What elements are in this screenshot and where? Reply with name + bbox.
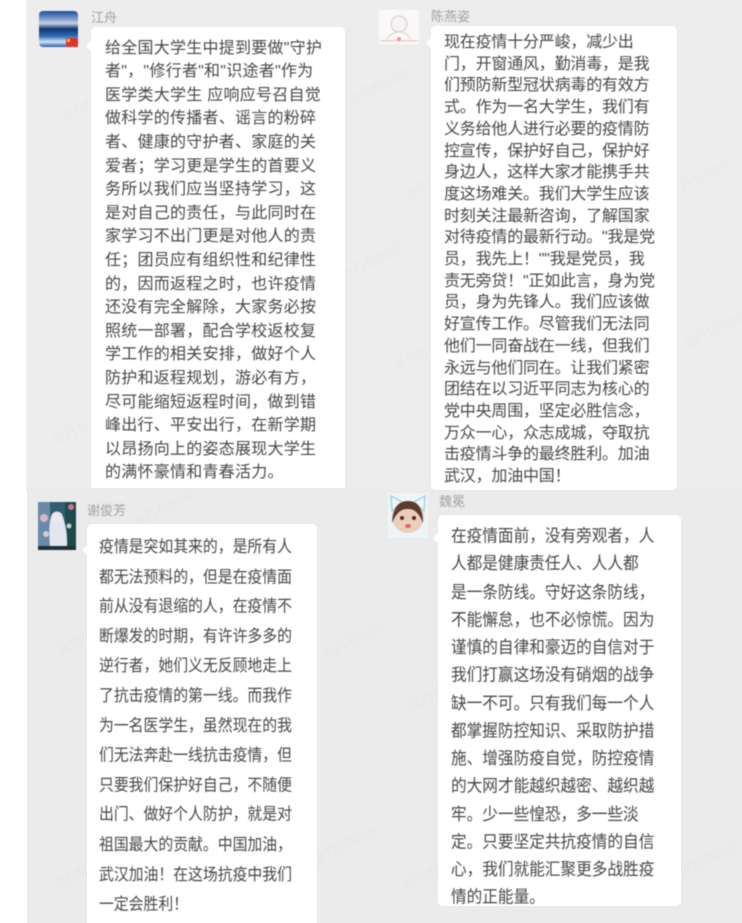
chat background: 张丹标5265: [666, 156, 733, 200]
icon: bubble tail: [426, 38, 431, 48]
message text: 断爆发的时期，有许许多多的: [99, 628, 292, 646]
message text: 情的正能量。: [451, 888, 545, 907]
chat background: 张丹标5265: [391, 328, 458, 372]
message text: 者、健康的守护者、家庭的关: [105, 134, 316, 151]
chat background: 张丹标5265: [401, 848, 468, 892]
message text: 团结在以习近平同志为核心的: [444, 381, 649, 398]
message text: 员，身为先锋人。我们应该做: [444, 294, 649, 311]
message text: 学工作的相关安排，做好个人: [105, 346, 316, 363]
message text: 出门、做好个人防护，就是对: [99, 807, 292, 825]
message text: 们预防新型冠状病毒的有效方: [444, 77, 649, 94]
message text: 前从没有退缩的人，在疫情不: [99, 598, 292, 616]
chat background: 张丹标5265: [51, 848, 118, 892]
panel: message from 江舟: [38, 10, 345, 488]
message text: 控宣传，保护好自己，保护好: [444, 143, 649, 160]
panel: message from 谢俊芳: [37, 501, 317, 923]
message text: 人都是健康责任人、人人都: [451, 555, 639, 574]
message text: 谨慎的自律和豪迈的自信对于: [451, 638, 654, 657]
message text: 的，因而返程之时，也许疫情: [105, 276, 316, 293]
message text: 度这场难关。我们大学生应该: [444, 186, 649, 203]
chat background: 张丹标5265: [346, 63, 413, 107]
message text: [104, 38, 322, 481]
message text: 对待疫情的最新行动。"我是党: [444, 229, 655, 246]
message text: 身边人，这样大家才能携手共: [444, 164, 649, 181]
message text: 家学习不出门更是对他人的责: [105, 228, 316, 245]
chat background: 张丹标5265: [321, 618, 388, 662]
chat background: 张丹标5265: [51, 403, 118, 447]
message text: 还没有完全解除，大家务必按: [105, 299, 316, 316]
message text: [450, 526, 654, 907]
panel: message from 魏冕: [388, 493, 681, 907]
chat background: 张丹标5265: [406, 668, 473, 712]
message text: 击疫情斗争的最终胜利。加油: [444, 446, 649, 463]
icon: bubble tail: [86, 41, 91, 51]
message text: 是对自己的责任，与此同时在: [105, 205, 316, 222]
message text: 在疫情面前，没有旁观者，人: [451, 527, 654, 546]
icon: bubble tail: [433, 533, 438, 543]
message text: 现在疫情十分严峻，减少出: [444, 34, 634, 51]
message text: 万众一心，众志成城，夺取抗: [444, 425, 649, 442]
chat background: 张丹标5265: [339, 238, 406, 282]
chat background: 张丹标5265: [401, 158, 468, 202]
message text: 的大网才能越织越密、越织越: [451, 777, 654, 796]
message text: 做科学的传播者、谣言的粉碎: [105, 110, 316, 127]
message text: 的满怀豪情和青春活力。: [105, 464, 284, 481]
message text: 爱者；学习更是学生的首要义: [105, 158, 316, 175]
message text: 疫情是突如其来的，是所有人: [99, 539, 292, 557]
message text: 永远与他们同在。让我们紧密: [444, 360, 649, 377]
message text: 为一名医学生，虽然现在的我: [99, 717, 292, 735]
message text: 者"，"修行者"和"识途者"作为: [105, 63, 313, 80]
message text: 施、增强防疫自觉，防控疫情: [451, 750, 654, 768]
message text: 逆行者，她们义无反顾地走上: [99, 658, 292, 676]
message text: 员，我先上！""我是党员，我: [444, 251, 645, 268]
message text: 都无法预料的，但是在疫情面: [99, 569, 292, 586]
message text: 祖国最大的贡献。中国加油，: [99, 837, 292, 855]
message text: 给全国大学生中提到要做"守护: [105, 40, 322, 57]
message text: 峰出行、平安出行，在新学期: [105, 417, 316, 434]
message text: 时刻关注最新咨询，了解国家: [444, 208, 649, 225]
message text: 武汉，加油中国！: [444, 468, 570, 485]
message text: 只要我们保护好自己，不随便: [99, 777, 292, 795]
name: 魏冕: 魏冕: [439, 494, 465, 509]
message bubble: [431, 26, 677, 490]
message text: 心，我们就能汇聚更多战胜疫: [451, 861, 654, 879]
message text: 都掌握防控知识、采取防护措: [451, 722, 654, 741]
icon: avatar sketched girl: [379, 10, 419, 44]
message text: 不能懈怠，也不必惊慌。因为: [451, 611, 654, 629]
message text: 缺一不可。只有我们每一个人: [451, 694, 654, 713]
message bubble: [438, 515, 681, 906]
chat background: 张丹标5265: [59, 80, 126, 124]
message text: 务所以我们应当坚持学习，这: [105, 181, 316, 198]
message text: 义务给他人进行必要的疫情防: [444, 121, 649, 138]
message text: 医学类大学生 应响应号召自觉: [105, 87, 321, 104]
message text: 牢。少一些惶恐，多一些淡: [451, 805, 639, 824]
icon: avatar cat-eared girl: [388, 493, 428, 538]
chat background: 张丹标5265: [56, 613, 123, 657]
message text: 党中央周围，坚定必胜信念，: [444, 403, 649, 420]
chat background: 张丹标5265: [311, 823, 378, 867]
message text: 一定会胜利！: [99, 896, 188, 914]
message text: 防护和返程规划，游必有方，: [105, 370, 316, 387]
name: 谢俊芳: 谢俊芳: [87, 503, 126, 518]
message text: 照统一部署，配合学校返校复: [105, 323, 316, 340]
message text: 他们一同奋战在一线，但我们: [444, 338, 649, 355]
message text: 我们打赢这场没有硝烟的战争: [451, 666, 654, 685]
message text: 了抗击疫情的第一线。而我作: [99, 688, 292, 706]
chat background: 张丹标5265: [671, 838, 738, 882]
message text: 好宣传工作。尽管我们无法同: [444, 316, 649, 333]
icon: avatar lake landscape with flag: [38, 10, 79, 48]
message text: 式。作为一名大学生，我们有: [444, 99, 649, 116]
name: 陈燕姿: 陈燕姿: [431, 9, 470, 24]
message text: 以昂扬向上的姿态展现大学生: [105, 441, 316, 458]
message text: 们无法奔赴一线抗击疫情，但: [99, 747, 292, 765]
message text: 责无旁贷！"正如此言，身为党: [444, 273, 655, 290]
panel: message from 陈燕姿: [379, 9, 677, 490]
icon: bubble tail: [82, 545, 87, 555]
message text: 门，开窗通风，勤消毒，是我: [444, 56, 649, 73]
icon: avatar white-haired girl: [37, 501, 77, 551]
chat background: 张丹标5265: [131, 485, 198, 529]
message text: [98, 537, 292, 914]
message bubble: [87, 524, 317, 923]
message bubble: [91, 27, 345, 488]
message text: 是一条防线。守好这条防线，: [451, 583, 654, 602]
message text: [444, 32, 656, 485]
message text: 武汉加油！在这场抗疫中我们: [99, 866, 292, 884]
message text: 定。只要坚定共抗疫情的自信: [451, 833, 654, 852]
name: 江舟: 江舟: [91, 10, 117, 25]
message text: 任；团员应有组织性和纪律性: [105, 252, 316, 269]
message text: 尽可能缩短返程时间，做到错: [105, 394, 316, 410]
